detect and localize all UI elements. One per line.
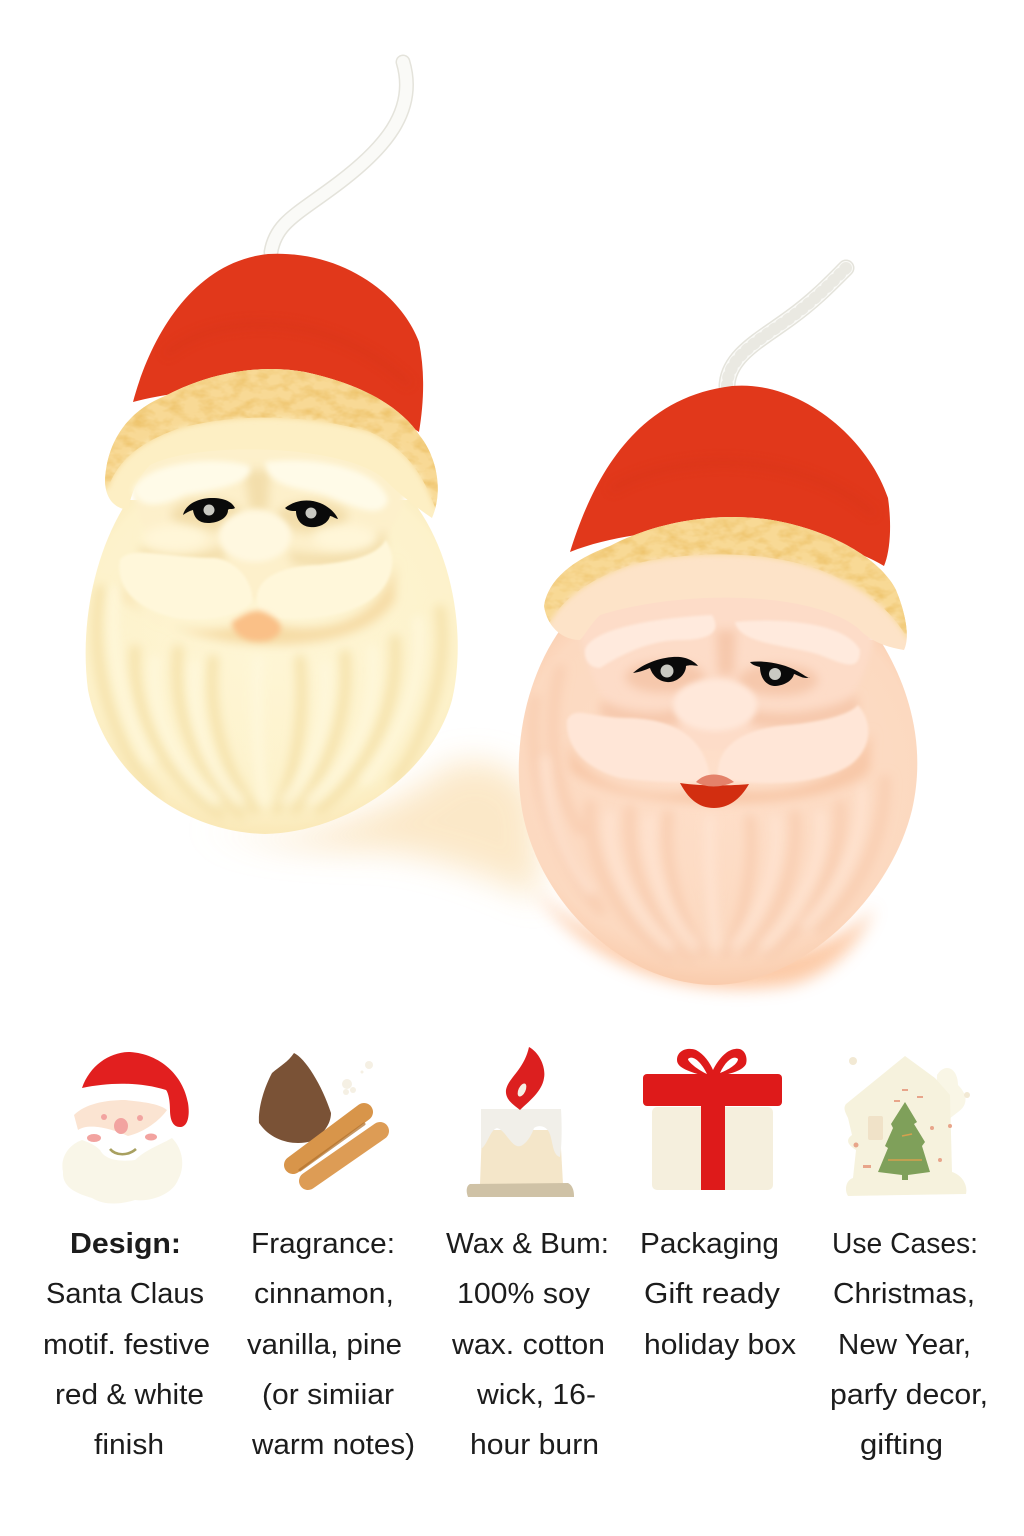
red hat [133, 254, 423, 432]
column: Wax and Burn: Wax & Bum: [446, 1228, 609, 1260]
eyebrows [585, 615, 860, 668]
icon: pine cone and cinnamon [259, 1053, 380, 1181]
mouth [680, 774, 749, 808]
bow [677, 1049, 747, 1076]
beard strands [97, 590, 442, 815]
tree [878, 1102, 930, 1180]
column: Design: Santa Claus [46, 1278, 204, 1310]
candle body [480, 1130, 563, 1184]
red hat [570, 386, 890, 566]
mouth [232, 611, 281, 641]
column: Wax and Burn: hour burn [470, 1429, 599, 1461]
wick [727, 268, 846, 386]
column: Packaging: Packaging [640, 1228, 779, 1260]
column: Wax and Burn: wax. cotton [451, 1329, 605, 1361]
column: Design: motif. festive [43, 1329, 210, 1361]
decorations [849, 1057, 970, 1168]
face and forehead [575, 566, 875, 750]
mouth [110, 1149, 136, 1154]
fur band: cream base with gold top [105, 369, 438, 518]
pine cone [259, 1053, 331, 1143]
column: Use Cases: parfy decor, [830, 1379, 988, 1411]
column: Packaging [640, 1228, 797, 1361]
face and forehead [128, 422, 410, 600]
nose [673, 679, 757, 731]
column: Fragrance [247, 1228, 415, 1461]
column: Fragrance: vanilla, pine [247, 1329, 402, 1361]
eye socket shading [600, 630, 858, 728]
bow holes [688, 1058, 738, 1074]
ribbon [701, 1100, 725, 1190]
moustache [567, 705, 872, 804]
spice sparkles [342, 1061, 373, 1095]
column: Fragrance: cinnamon, [254, 1278, 394, 1310]
left eye [633, 657, 698, 682]
beard strands [533, 670, 885, 960]
column: Use Cases: New Year, [838, 1329, 971, 1361]
house [845, 1056, 966, 1196]
column: Wax and Burn [446, 1228, 609, 1461]
column: Packaging: holiday box [644, 1329, 797, 1361]
column: Design: finish [94, 1429, 164, 1461]
wax drip [481, 1109, 562, 1157]
column: Design: red & white [55, 1379, 204, 1411]
hat shading [165, 324, 410, 385]
moustache [119, 540, 396, 645]
icon: gift box [643, 1049, 782, 1190]
column: Fragrance: Fragrance: [251, 1228, 395, 1260]
window [868, 1116, 883, 1140]
hat shading [610, 463, 875, 515]
eyebrows [133, 460, 388, 511]
column: Use Cases: gifting [860, 1429, 943, 1461]
box [652, 1107, 773, 1190]
cast shadows under candles [200, 762, 875, 989]
wick [271, 62, 406, 252]
cheeks and nose [87, 1114, 157, 1142]
candle: cream Santa (left) [86, 62, 458, 834]
tree garland [888, 1134, 922, 1160]
icon: house with tree [845, 1056, 970, 1196]
column: Wax and Burn: 100% soy [457, 1278, 591, 1310]
beard body [519, 630, 917, 985]
icon: candle [467, 1047, 574, 1197]
flame [506, 1047, 544, 1110]
chimney [935, 1068, 966, 1130]
eye socket shading [140, 470, 385, 567]
column: Fragrance: warm notes) [251, 1429, 415, 1461]
cheeks [143, 525, 377, 551]
fur band: peach base with gold top [544, 517, 907, 650]
column: Design [43, 1228, 210, 1461]
candle: pink Santa (right) [519, 268, 917, 985]
column: Use Cases: Christmas, [833, 1278, 975, 1310]
cinnamon sticks [293, 1112, 380, 1181]
column: Packaging: Gift ready [644, 1278, 781, 1310]
red hat [82, 1052, 189, 1127]
beard [62, 1138, 182, 1204]
column: Use Cases [830, 1228, 988, 1461]
nose [219, 510, 291, 562]
right eye [750, 661, 810, 686]
right eye [285, 500, 338, 527]
left eye [183, 498, 235, 523]
base [467, 1183, 574, 1197]
icon: Santa face [62, 1052, 189, 1204]
column: Use Cases: Use Cases: [832, 1228, 978, 1260]
face [74, 1100, 167, 1136]
beard body [86, 500, 458, 834]
column: Wax and Burn: wick, 16- [476, 1379, 596, 1411]
column: Fragrance: (or simiiar [262, 1379, 394, 1411]
column: Design: Design: [70, 1228, 181, 1260]
lid [643, 1074, 782, 1106]
flame core [516, 1082, 528, 1098]
